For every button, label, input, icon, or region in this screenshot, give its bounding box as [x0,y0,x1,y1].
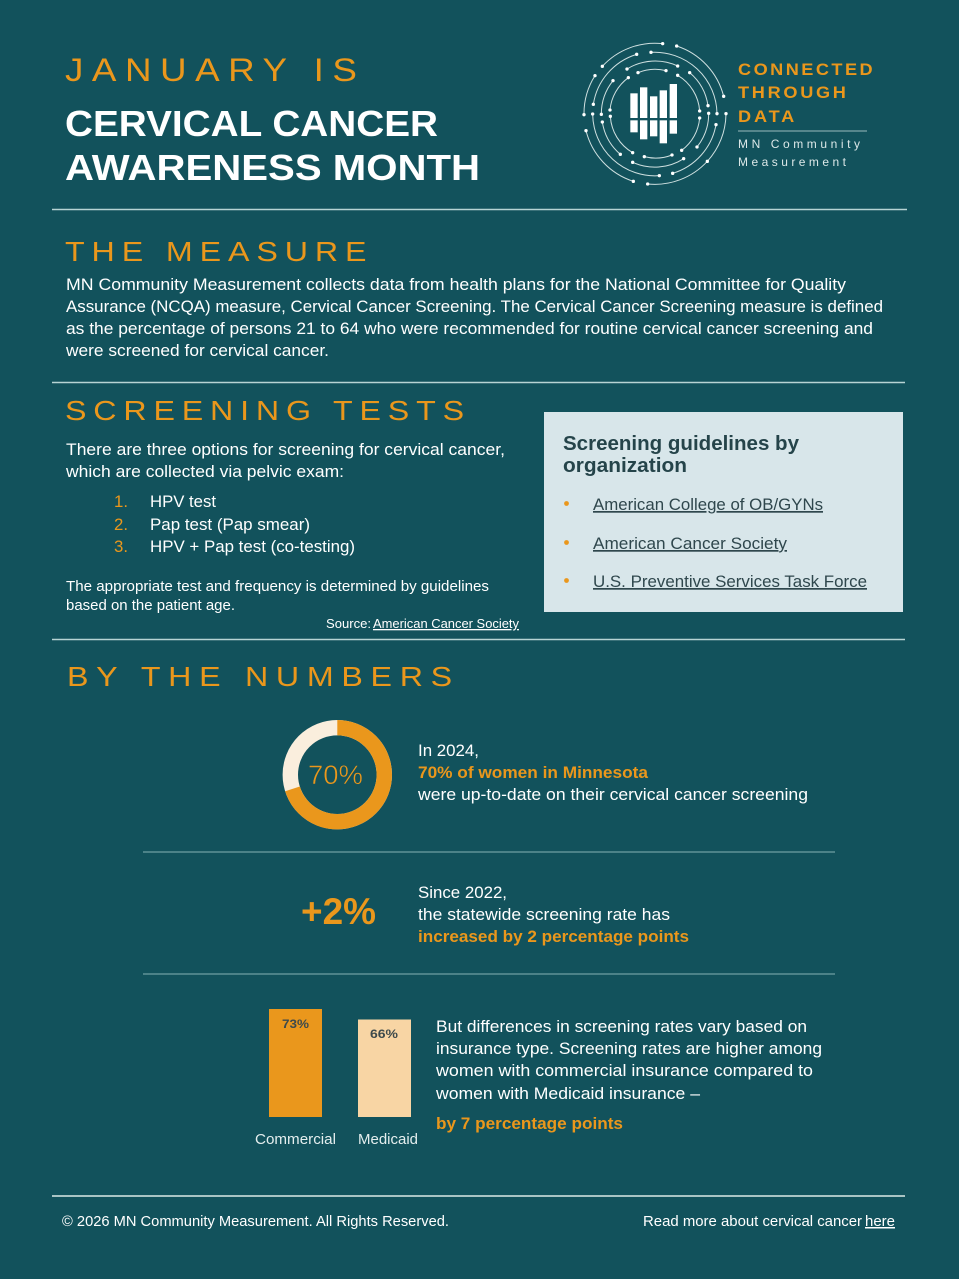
source line: Source: [326,616,371,631]
heading: screening tests: SCREENING TESTS [65,396,471,426]
frequency note: The appropriate test and frequency is determined by guidelines [66,578,489,595]
stat text: insurance type. Screening rates are higher among [436,1039,822,1058]
panel heading: organization [563,455,687,477]
numbered list of tests: Pap test (Pap smear) [150,515,310,534]
heading: by the numbers: BY THE NUMBERS [67,662,460,692]
stat: 70 percent screened [290,728,808,822]
frequency note: based on the patient age. [66,597,235,614]
footer [62,1213,895,1230]
guideline links: American Cancer Society [593,534,787,553]
read more link: here [865,1213,895,1230]
stat text [418,883,689,946]
numbered list of tests: 3. [114,537,128,556]
source line: American Cancer Society [373,616,519,631]
bar: medicaid: Medicaid [358,1131,418,1148]
measure description: were screened for cervical cancer. [65,341,329,360]
logo wordmark: DATA [738,107,797,126]
stat text: increased by 2 percentage points [418,927,689,946]
numbered list of tests: HPV + Pap test (co-testing) [150,537,355,556]
stat text: were up-to-date on their cervical cancer screening [417,785,808,804]
title main: CERVICAL CANCER [65,103,438,144]
numbered list of tests: HPV test [150,492,216,511]
stat text [417,741,808,804]
stat text: 70% of women in Minnesota [418,763,649,782]
guideline links: American College of OB/GYNs [593,495,823,514]
title main: AWARENESS MONTH [65,147,480,188]
donut chart: 70%: 70% [308,760,363,790]
guideline links: U.S. Preventive Services Task Force [593,572,867,591]
measure description: Assurance (NCQA) measure, Cervical Cancer Screening. The Cervical Cancer Screening measure is defined [66,297,883,316]
screening intro: which are collected via pelvic exam: [65,462,344,481]
copyright: © 2026 MN Community Measurement. All Rights Reserved. [62,1213,449,1230]
measure description: as the percentage of persons 21 to 64 who were recommended for routine cervical cancer screening and [66,319,873,338]
stat text: But differences in screening rates vary based on [436,1017,807,1036]
stat: plus two points [301,883,689,946]
stat text: Since 2022, [418,883,507,902]
logo wordmark: MN Community [738,137,860,151]
bar: commercial [255,1009,336,1148]
bar: medicaid: 66% [370,1027,398,1041]
read more link: Read more about cervical cancer [643,1213,862,1230]
bar: medicaid [358,1020,418,1148]
big number: +2% [301,891,376,932]
measure description [65,275,883,360]
measure description: MN Community Measurement collects data from health plans for the National Committee for Quality [66,275,847,294]
stat: insurance differences [255,1009,822,1148]
stat text: In 2024, [418,741,479,760]
heading: the measure: THE MEASURE [65,237,373,267]
numbered list of tests: 2. [114,515,128,534]
logo wordmark: THROUGH [738,83,849,102]
numbered list of tests [114,492,355,556]
panel heading [563,433,800,477]
bar: commercial: Commercial [255,1131,336,1148]
bar: commercial: 73% [282,1017,309,1031]
stat text: women with commercial insurance compared to [435,1061,813,1080]
logo wordmark: CONNECTED [738,60,875,79]
title main [65,103,480,188]
screening intro: There are three options for screening for cervical cancer, [66,440,505,459]
logo: Connected Through Data [582,42,875,186]
screening intro [65,440,505,481]
logo wordmark: Measurement [738,155,847,169]
numbered list of tests: 1. [114,492,128,511]
stat text: women with Medicaid insurance – [435,1084,701,1103]
stat text [435,1017,822,1133]
section: screening tests [65,396,519,631]
panel: screening guidelines [544,412,903,612]
section: the measure [65,237,883,360]
icon: circular data rings with bars [582,42,728,186]
bar chart [255,1009,418,1148]
stat text: by 7 percentage points [436,1114,623,1133]
stat text: the statewide screening rate has [418,905,670,924]
panel heading: Screening guidelines by [563,433,800,455]
title kicker: JANUARY IS [65,53,365,88]
guideline links [564,495,867,591]
title [65,53,480,188]
frequency note [66,578,489,614]
logo wordmark [738,60,875,169]
donut chart: 70% [290,728,384,822]
